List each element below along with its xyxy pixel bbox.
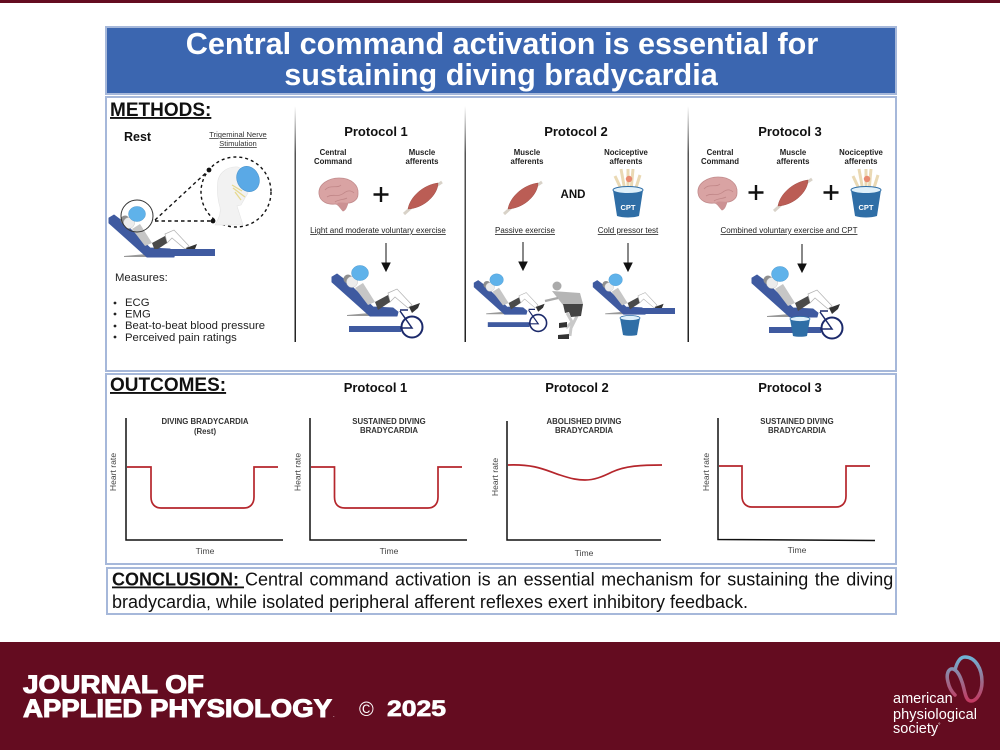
muscle afferents label: afferents <box>511 157 544 166</box>
plus sign <box>824 185 838 200</box>
chart: protocol 2 abolished bradycardia: ABOLISHED DIVING <box>547 417 621 426</box>
icon: cold pressor bucket <box>851 169 881 218</box>
muscle afferents label: afferents <box>777 157 810 166</box>
icon: brain <box>319 178 358 211</box>
title banner: sustaining diving bradycardia <box>284 58 719 92</box>
protocol 2 column <box>474 124 675 339</box>
muscle afferents label: Muscle <box>780 148 807 157</box>
caption: combined voluntary exercise and cpt: Combined voluntary exercise and CPT <box>721 226 858 235</box>
arrow <box>382 243 390 271</box>
plus sign <box>374 187 388 202</box>
conclusion line two: bradycardia, while isolated peripheral afferent reflexes exert inhibitory feedback. <box>112 592 748 612</box>
icon: cold pressor bucket <box>613 169 643 218</box>
measures list <box>114 272 265 344</box>
panel: methods <box>106 97 896 371</box>
logo: american physiological society: ° <box>938 723 941 729</box>
measures list: EMG <box>125 308 151 320</box>
protocol 3 heading: Protocol 3 <box>758 124 822 139</box>
chart: protocol 2 abolished bradycardia: Time <box>575 548 594 558</box>
arrow <box>624 243 632 271</box>
protocol 1 outcome heading: Protocol 1 <box>344 380 407 395</box>
caption: passive exercise: Passive exercise <box>495 226 556 235</box>
protocol 3 column <box>698 124 884 338</box>
journal name: APPLIED PHYSIOLOGY <box>23 695 332 723</box>
chart: protocol 1 sustained bradycardia <box>292 417 467 556</box>
title banner: Central command activation is essential for <box>186 27 818 61</box>
icon: participant with passive cycling <box>474 274 547 331</box>
chart: protocol 1 sustained bradycardia: BRADYCARDIA <box>360 426 418 435</box>
icon: muscle <box>404 182 442 214</box>
chart: rest diving bradycardia: Heart rate <box>108 453 118 491</box>
nociceptive afferents label: afferents <box>845 157 878 166</box>
chart: protocol 1 sustained bradycardia: Time <box>380 546 399 556</box>
copyright: 2025 <box>387 696 446 721</box>
protocol 1 heading: Protocol 1 <box>344 124 408 139</box>
muscle afferents label: afferents <box>406 157 439 166</box>
protocol 2 heading: Protocol 2 <box>544 124 608 139</box>
caption: cold pressor test: Cold pressor test <box>598 226 659 235</box>
icon: muscle <box>774 179 812 211</box>
muscle afferents label: Muscle <box>514 148 541 157</box>
icon: magnified head with trigeminal nerve <box>155 157 271 227</box>
logo: american physiological society: american <box>893 691 953 707</box>
measures list: Beat-to-beat blood pressure <box>125 320 265 332</box>
chart: protocol 3 sustained bradycardia: Time <box>788 545 807 555</box>
chart: rest diving bradycardia: DIVING BRADYCARDIA <box>161 417 249 426</box>
logo: american physiological society <box>893 657 982 737</box>
central command label: Command <box>314 157 352 166</box>
logo: american physiological society: physiological <box>893 707 977 723</box>
icon: muscle <box>504 182 542 214</box>
protocol 2 outcome heading: Protocol 2 <box>545 380 609 395</box>
arrow <box>519 242 527 270</box>
icon: participant cycling with cold pressor <box>752 266 842 338</box>
chart: protocol 3 sustained bradycardia <box>701 417 875 555</box>
icon: participant with cold pressor <box>593 274 675 336</box>
muscle afferents label: Muscle <box>409 148 436 157</box>
journal name <box>23 671 332 723</box>
chart: protocol 2 abolished bradycardia: Heart rate <box>490 458 500 496</box>
rest column <box>109 130 271 344</box>
chart: protocol 1 sustained bradycardia: SUSTAINED DIVING <box>352 417 426 426</box>
protocol 3 outcome heading: Protocol 3 <box>758 380 822 395</box>
footer band <box>0 642 1000 750</box>
chart: rest diving bradycardia <box>108 417 283 556</box>
arrow <box>798 244 806 272</box>
and label: AND <box>561 189 585 201</box>
central command label: Central <box>707 148 733 157</box>
central command label: Command <box>701 157 739 166</box>
logo: american physiological society: society <box>893 721 938 737</box>
title banner <box>106 27 896 94</box>
chart: rest diving bradycardia: (Rest) <box>194 427 216 436</box>
top strip <box>0 0 1000 3</box>
chart: rest diving bradycardia: Time <box>196 546 215 556</box>
plus sign <box>748 185 764 200</box>
chart: protocol 3 sustained bradycardia: BRADYCARDIA <box>768 426 826 435</box>
copyright: © <box>359 699 374 721</box>
icon: cold pressor bucket: CPT <box>858 203 874 212</box>
panel: conclusion <box>107 568 896 614</box>
caption: light and moderate voluntary exercise: Light and moderate voluntary exercise <box>310 226 446 235</box>
icon: brain <box>698 177 737 210</box>
nociceptive afferents label: Nociceptive <box>604 148 649 157</box>
outcomes heading: OUTCOMES: <box>110 375 226 396</box>
central command label: Central <box>320 148 346 157</box>
icon: assistant moving pedal <box>545 282 583 339</box>
chart: protocol 3 sustained bradycardia: SUSTAINED DIVING <box>760 417 834 426</box>
measures list: Perceived pain ratings <box>125 332 237 344</box>
icon: participant on cycle <box>332 266 422 338</box>
rest heading: Rest <box>124 130 152 144</box>
copyright: . <box>333 713 335 719</box>
protocol 1 column <box>310 124 446 338</box>
trigeminal nerve stimulation label: Stimulation <box>219 139 257 148</box>
methods heading: METHODS: <box>110 100 211 121</box>
measures list: ECG <box>125 297 149 309</box>
chart: protocol 1 sustained bradycardia: Heart rate <box>292 453 302 491</box>
conclusion line one: Central command activation is an essential mechanism for sustaining the diving <box>245 570 893 590</box>
chart: protocol 2 abolished bradycardia <box>490 417 662 558</box>
nociceptive afferents label: Nociceptive <box>839 148 884 157</box>
conclusion line one: CONCLUSION: <box>112 570 244 590</box>
trigeminal nerve stimulation label: Trigeminal Nerve <box>209 130 267 139</box>
measures list: Measures: <box>115 272 168 284</box>
chart: protocol 2 abolished bradycardia: BRADYCARDIA <box>555 426 613 435</box>
icon: cold pressor bucket: CPT <box>620 203 636 212</box>
copyright <box>333 696 446 721</box>
journal name: JOURNAL OF <box>23 671 204 699</box>
nociceptive afferents label: afferents <box>610 157 643 166</box>
panel: outcomes <box>106 374 896 564</box>
icon: reclined participant with ice pack <box>109 200 215 257</box>
chart: protocol 3 sustained bradycardia: Heart rate <box>701 453 711 491</box>
